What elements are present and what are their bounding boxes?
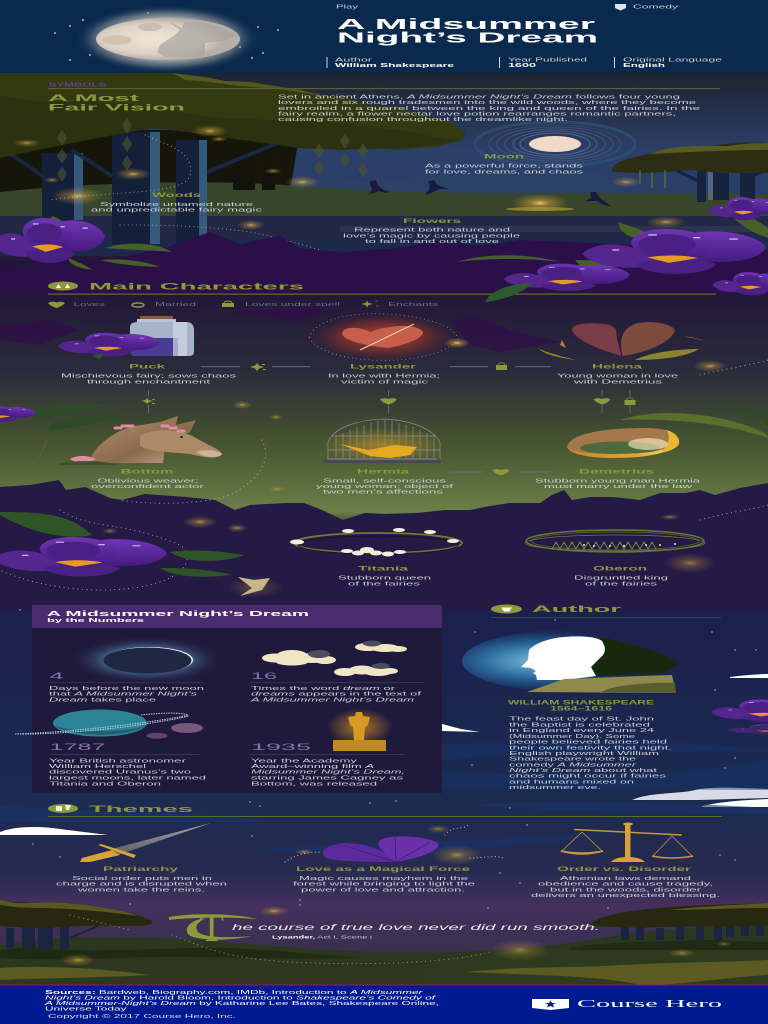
heading: themes: Themes [89, 803, 193, 814]
label: Titania: of the fairies [348, 581, 421, 587]
stat: 4 days, eclipse icon [49, 636, 225, 704]
stat: 1787, Uranus icon: 1787 [50, 742, 106, 753]
text: symbols heading [48, 82, 720, 112]
text: author biography: The feast day of St. John [509, 717, 654, 723]
text: symbols introduction [278, 94, 700, 123]
legend: Married [155, 302, 196, 308]
label: Hermia: young woman; object of [316, 484, 454, 490]
stat: 4 days, eclipse icon: 4 [50, 671, 65, 682]
stat: 4 days, eclipse icon: that A Midsummer Night’s [49, 692, 198, 698]
label: Titania [338, 566, 431, 587]
stat: 16 times, sheep clouds: Times the word dream or [251, 686, 395, 692]
symbol: flowers text [343, 218, 520, 245]
symbol: woods text [91, 192, 263, 214]
portrait: Shakespeare silhouette [462, 629, 688, 693]
character: Titania flower crown [290, 528, 462, 556]
panel: closing landscape [0, 900, 768, 985]
text: patriarchy: Social order puts men in [72, 876, 212, 882]
original language [614, 57, 722, 69]
text: author biography: the Baptist is celebrated [509, 722, 650, 728]
text: order vs disorder: delivers an unexpected blessing. [531, 893, 720, 899]
label: Hermia: Hermia [357, 468, 410, 475]
glowing fireflies [102, 360, 727, 573]
hanging vines [57, 118, 368, 182]
label: Oberon: of the fairies [585, 581, 658, 587]
title: A Midsummer [337, 17, 596, 33]
character: Puck potion bottle and flower [58, 316, 194, 359]
text: love as a magical force [293, 866, 475, 893]
label: Bottom: Bottom [120, 468, 175, 475]
text: symbols introduction: fairy realm, a flower nectar love potion rearranges romantic partners, [278, 111, 677, 117]
fireflies [13, 125, 686, 284]
character: Lysander heart with arrow [307, 312, 470, 362]
sources: Night’s Dream by Harold Bloom, Introduction to Shakespeare’s Comedy of [45, 996, 436, 1002]
logo: Course Hero: Course Hero [577, 998, 723, 1010]
character: Hermia bird cage [320, 419, 444, 463]
text: author biography [509, 717, 672, 791]
text: symbols heading: A Most [48, 92, 139, 103]
leaves [40, 205, 768, 270]
text: author biography: chaos might occur if fairies [509, 774, 667, 780]
symbol: flowers text: love’s magic by causing people [343, 233, 520, 239]
character: Oberon twig crown [525, 530, 705, 552]
stat: 1935, Oscar statuette icon [250, 708, 405, 787]
logo: Course Hero [532, 998, 723, 1010]
stat: 16 times, sheep clouds: 16 [251, 671, 277, 682]
character: Helena broken heart leaf [538, 322, 706, 360]
purple undergrowth [0, 232, 768, 294]
caption: author name: WILLIAM SHAKESPEARE [508, 700, 654, 706]
label: Lysander: Lysander [350, 364, 417, 371]
stat: 1787, Uranus icon: discovered Uranus’s two [49, 770, 191, 776]
text: symbols heading: Fair Vision [48, 102, 186, 112]
text: patriarchy: charge and is disrupted when [56, 882, 227, 888]
label: Bottom [91, 468, 204, 490]
side flower: author section [711, 700, 768, 735]
legend: Enchants [388, 302, 439, 308]
text: symbols introduction: embroiled in a quarrel between the king and queen of the fairies. In the [278, 106, 700, 112]
stat: 1935, Oscar statuette icon: Bottom, was released [251, 781, 377, 787]
label: Demetrius: must marry under the law [544, 484, 692, 490]
text: patriarchy: women take the reins. [76, 887, 205, 893]
stat: 16 times, sheep clouds: A Midsummer Night’s Dream [249, 698, 415, 704]
text: author biography: (Midsummer Day). Some [509, 734, 635, 740]
label: Puck [61, 364, 237, 385]
symbol: flowers text: Represent both nature and [354, 228, 510, 234]
left trees [0, 900, 152, 953]
symbol: moon text: for love, dreams, and chaos [425, 169, 584, 175]
icon: sword [80, 823, 211, 862]
character: Bottom donkey head [58, 416, 222, 465]
label: Helena: Young woman in love [557, 374, 678, 380]
ground hills [0, 182, 768, 225]
label: Lysander: In love with Hermia; [328, 374, 441, 380]
drop capital [169, 905, 257, 950]
year published: Year Published [508, 58, 587, 64]
stat: 1787, Uranus icon [15, 710, 206, 787]
dark water band [0, 216, 768, 256]
big pansy with leaves [0, 512, 245, 577]
icon: scales [561, 822, 693, 862]
text: patriarchy: Patriarchy [103, 866, 179, 873]
title [337, 17, 598, 46]
stat: 1787, Uranus icon: Titania and Oberon [49, 781, 161, 787]
sparkle trails [50, 135, 340, 256]
text: author biography: Night’s Dream about what [509, 768, 658, 774]
icon: comedy mask [615, 4, 626, 10]
label: Hermia: Small, self-conscious [323, 478, 447, 484]
flowers [0, 218, 105, 263]
label: Hermia [316, 468, 454, 496]
text: order vs disorder: Order vs. Disorder [557, 866, 692, 873]
panel: symbols scene [0, 73, 768, 295]
label: Oberon: Disgruntled king [574, 576, 668, 582]
label: Bottom: Oblivious weaver; [98, 478, 200, 484]
author info: Author [335, 58, 372, 64]
label: Demetrius [535, 468, 700, 490]
year published: 1600 [508, 63, 536, 69]
label: Puck: through enchantment [87, 379, 211, 385]
text: author biography: Shakespeare wrote the [509, 757, 636, 763]
landscape fireflies [490, 939, 550, 961]
text: order vs disorder: Athenian laws demand [560, 876, 691, 882]
quote [169, 905, 600, 950]
text: author biography: and humans mixed on [509, 779, 634, 785]
year published [499, 57, 587, 69]
stat: 1787, Uranus icon: Year British astronomer [49, 758, 186, 764]
stat: 1935, Oscar statuette icon: Midsummer Night’s Dream, [251, 770, 405, 776]
right tree [612, 143, 768, 202]
quotation text: he course of true love never did run smooth. [232, 922, 600, 932]
label: Oberon: Oberon [593, 566, 648, 573]
panel: author [462, 603, 721, 791]
heading: author: Author [532, 603, 622, 614]
label: Lysander [328, 364, 441, 385]
text: symbols introduction: lovers and six rough tradesmen into the wild woods, where they become [278, 100, 696, 106]
original language: Original Language [623, 58, 722, 64]
label: Play: Play [336, 4, 359, 10]
label: Hermia: two men’s affections [323, 490, 444, 496]
panel: by the numbers [15, 605, 442, 793]
bushes [0, 948, 360, 960]
main canopy [0, 73, 466, 158]
label: Puck: Mischievous fairy; sows chaos [61, 374, 237, 380]
label: Helena: with Demetrius [572, 379, 663, 385]
small left flower [0, 406, 36, 422]
forest shadow [0, 130, 300, 196]
heading: themes [48, 803, 722, 817]
right trees [588, 903, 768, 940]
symbol: flowers text: to fall in and out of love [365, 239, 499, 245]
text: author biography: comedy A Midsummer [509, 762, 636, 768]
panel: by the numbers: by the Numbers [47, 618, 144, 624]
stat: 16 times, sheep clouds: dreams appears in the text of [251, 692, 422, 698]
symbol: woods text: Woods [152, 192, 202, 199]
text: love as a magical force: forest while bringing to light the [293, 882, 475, 888]
label: Comedy: Comedy [633, 4, 679, 10]
text: order vs disorder: obedience and cause tragedy, [538, 882, 714, 888]
label: Puck: Puck [129, 364, 166, 371]
icon: fairy silhouette [227, 576, 283, 598]
text: patriarchy [56, 866, 227, 893]
text: order vs disorder: but in the woods, disorder [550, 887, 701, 893]
moon with rings [475, 122, 635, 166]
text: author biography: English playwright William [509, 751, 660, 757]
label: Lysander: victim of magic [341, 379, 429, 385]
original language: English [623, 63, 665, 69]
panel: themes [48, 803, 722, 899]
text: symbols introduction: causing confusion throughout the dreamlike night. [278, 117, 568, 123]
label: Titania: Titania [358, 566, 409, 573]
drop capital: T [200, 905, 224, 950]
label: Bottom: overconfident actor [91, 484, 204, 490]
text: love as a magical force: Magic causes mayhem in the [299, 876, 468, 882]
label: Titania: Stubborn queen [338, 576, 431, 582]
stat: 4 days, eclipse icon: Dream takes place [49, 698, 156, 704]
caption: author name: 1564–1616 [550, 706, 613, 712]
sources: Universe Today [45, 1006, 127, 1012]
symbol: moon text [425, 154, 584, 175]
text: symbols introduction: Set in ancient Athens, A Midsummer Night’s Dream follows four young [278, 94, 680, 100]
symbol: woods text: Symbolize untamed nature [100, 202, 253, 208]
symbol: flowers text: Flowers [403, 218, 462, 225]
moon illustration with horse shadow [55, 5, 278, 73]
heading: main characters: Main Characters [89, 280, 304, 292]
dotted fairy trail [0, 360, 768, 590]
stat: 1787, Uranus icon: largest moons, later named [49, 776, 206, 782]
label: Demetrius: Stubborn young man Hermia [535, 478, 700, 484]
label: Helena: Helena [592, 364, 643, 371]
caption: author name [508, 700, 654, 712]
attribution: Lysander, Act I, Scene i [272, 935, 372, 941]
dark foliage silhouette [0, 480, 768, 610]
stat: 1935, Oscar statuette icon: 1935 [251, 742, 311, 753]
leaf overlapping rule [485, 283, 532, 302]
stat: 1935, Oscar statuette icon: Award–winning film A [251, 764, 375, 770]
sources: Sources: Bardweb, Biography.com, IMDb, Introduction to A Midsummer [45, 990, 423, 996]
symbol: moon text: As a powerful force, stands [425, 164, 584, 170]
sources [43, 990, 440, 1012]
symbol: woods text: and unpredictable fairy magic [91, 208, 263, 214]
foreground leaves [0, 404, 768, 480]
text: author biography: in England every June 24 [509, 728, 654, 734]
author info [326, 57, 454, 69]
legend [48, 301, 439, 308]
relation connectors [141, 363, 636, 572]
text: love as a magical force: power of love and attraction. [301, 887, 465, 893]
stat: 1787, Uranus icon: William Herschel [49, 764, 146, 770]
panel: main characters [0, 280, 768, 610]
icon: love petal [285, 825, 503, 865]
character: Demetrius gold ring [567, 428, 679, 458]
legend: Loves under spell [245, 302, 340, 308]
night sky details [0, 610, 768, 908]
label: Helena [557, 364, 678, 385]
stat: 1935, Oscar statuette icon: starring James Cagney as [251, 776, 404, 782]
symbol: moon text: Moon [484, 154, 525, 160]
heading: author [491, 603, 721, 618]
text: love as a magical force: Love as a Magical Force [296, 866, 471, 873]
runners [368, 180, 612, 207]
panel: by the numbers: A Midsummer Night’s Dream [47, 609, 310, 618]
hills [0, 925, 768, 985]
header band [0, 0, 768, 73]
text: author biography: people believed fairies held [509, 740, 667, 746]
text: symbols heading: SYMBOLS [48, 82, 107, 88]
stat: 1935, Oscar statuette icon: Year the Academy [251, 758, 358, 764]
text: author biography: midsummer eve. [509, 785, 601, 791]
footer [0, 984, 768, 1024]
stat: 4 days, eclipse icon: Days before the new moon [49, 686, 204, 692]
text: author biography: their own festivity that night. [509, 745, 672, 751]
legend: Loves [74, 302, 106, 308]
title: Night’s Dream [337, 30, 598, 46]
text: order vs disorder [531, 866, 720, 899]
tree trunks [8, 132, 285, 245]
author info: William Shakespeare [335, 63, 454, 69]
stat: 16 times, sheep clouds [249, 640, 424, 704]
copyright: Copyright © 2017 Course Hero, Inc. [48, 1013, 236, 1020]
label: Oberon [574, 566, 668, 587]
purple background blotches [0, 305, 560, 352]
heading: main characters [48, 280, 716, 295]
label: Demetrius: Demetrius [579, 468, 655, 475]
sources: A Midsummer-Night’s Dream by Katharine Lee Bates, Shakespeare Online, [43, 1001, 440, 1007]
